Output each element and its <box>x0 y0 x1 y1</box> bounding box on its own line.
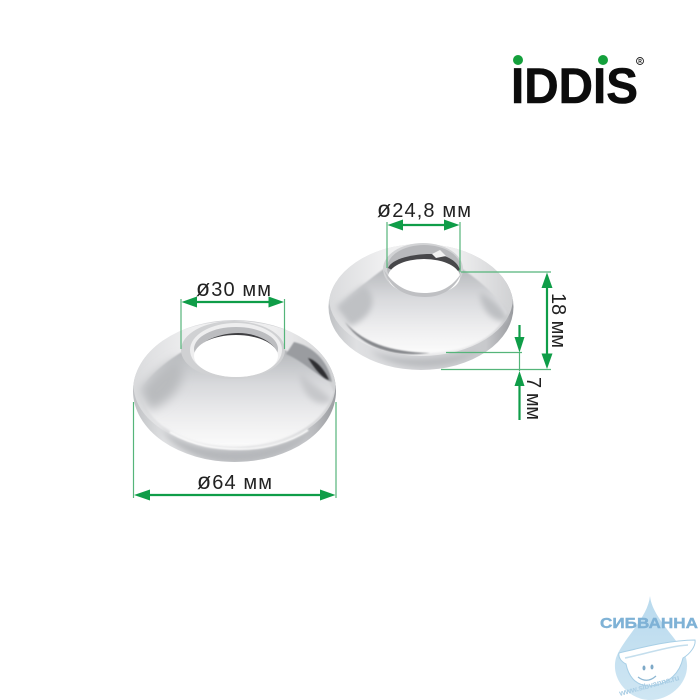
dimension: 24,8 mm <box>377 196 471 272</box>
dimension: 30 mm <box>181 275 284 349</box>
dimension: 64 mm <box>134 402 336 500</box>
flange: left chrome escutcheon <box>133 320 336 463</box>
dimension: 18 mm: 18 мм <box>547 293 569 348</box>
watermark: Sibvanna <box>600 596 699 700</box>
dimension: 7 mm: 7 мм <box>522 377 544 420</box>
collar and hole: right <box>383 243 463 297</box>
dimension: 7 mm <box>446 325 544 420</box>
collar and hole: left <box>181 321 285 379</box>
dimension: 24,8 mm: ø24,8 мм <box>377 196 471 222</box>
watermark: Sibvanna: СИБВАННА <box>600 616 699 632</box>
dimension: 30 mm: ø30 мм <box>196 275 271 301</box>
flange: right chrome escutcheon <box>328 240 514 370</box>
logo: IDDIS: IDDIS <box>511 58 638 114</box>
dimension: 64 mm: ø64 мм <box>197 468 272 494</box>
watermark: Sibvanna: www.sibvanna.ru <box>617 673 681 698</box>
dimension: 18 mm <box>441 272 569 370</box>
logo: IDDIS: R <box>638 59 642 65</box>
